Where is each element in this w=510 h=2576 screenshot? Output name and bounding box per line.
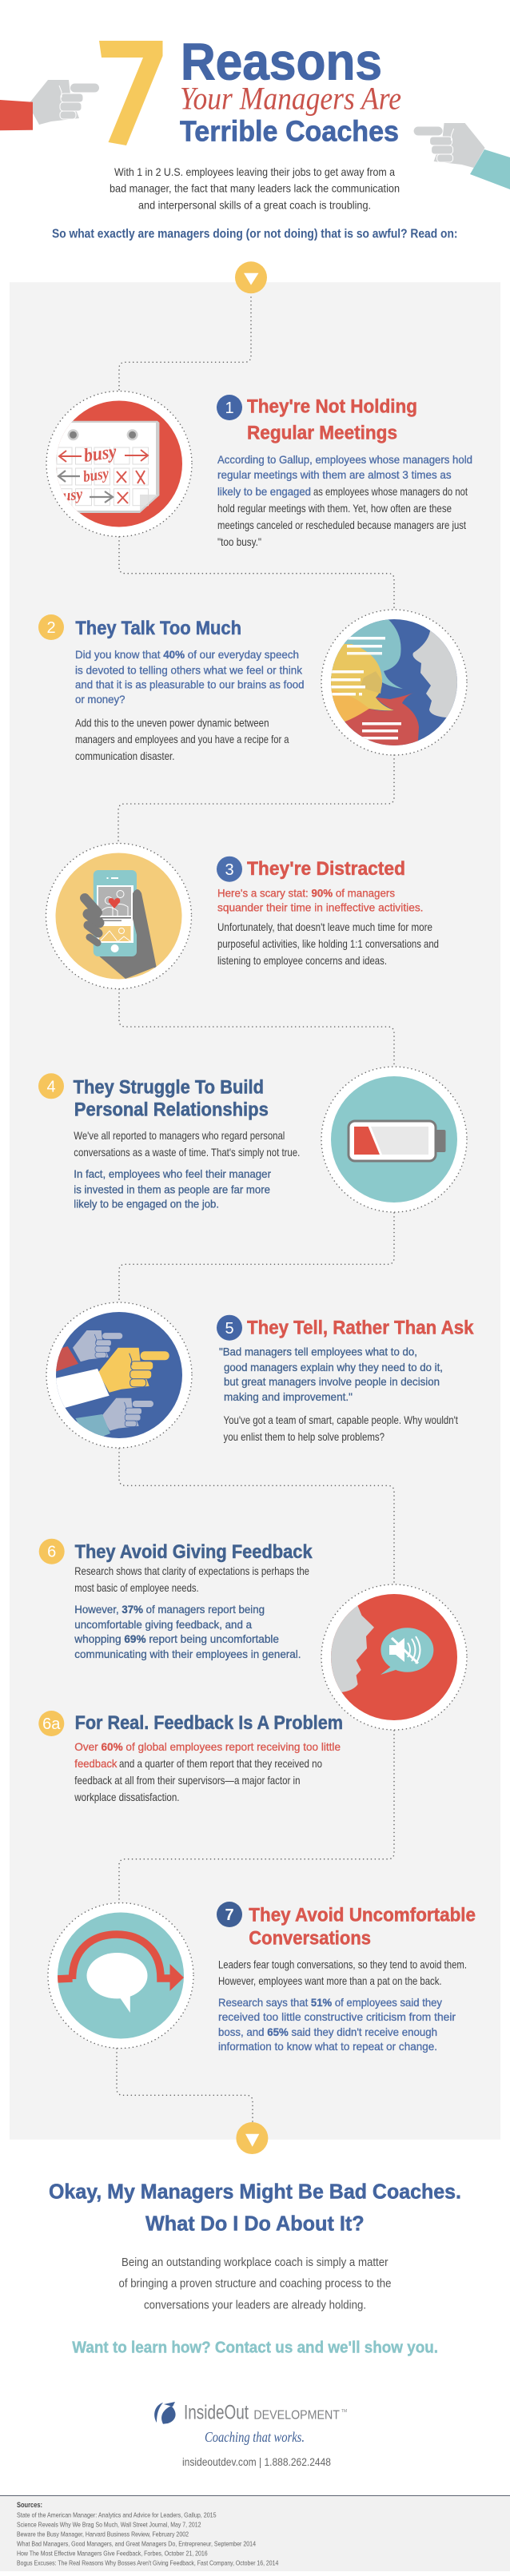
closing heading: What Do I Do About It? [145,2212,365,2236]
number badge 3: 3 [225,861,234,879]
body text 2: and that it is as pleasurable to our brains as food [75,678,304,690]
title: Your Managers Are [180,81,401,117]
hand pointing left with teal sleeve [414,123,510,189]
icon: pointing hands [46,1302,192,1448]
heading 4: Personal Relationships [74,1099,269,1121]
body text 3: Unfortunately, that doesn't leave much time for more [217,920,432,933]
body text 7: boss, and 65% said they didn't receive enough [218,2025,437,2038]
closing text: conversations your leaders are already holding. [144,2299,366,2312]
logo: InsideOut Development: DEVELOPMENT [253,2408,340,2422]
heading 7: They Avoid Uncomfortable [249,1904,476,1926]
section: reason 6 [38,1539,467,1803]
intro text: bad manager, the fact that many leaders lack the communication [110,182,400,195]
icon: calendar busy [46,392,192,537]
body text 2: Add this to the uneven power dynamic between [75,716,269,729]
panel: sources: What Bad Managers, Good Managers, and Great Managers Do, Entrepreneur, September 2014 [17,2540,256,2548]
panel: sources: Science Reveals Why We Brag So Much, Wall Street Journal, May 7, 2012 [17,2521,201,2529]
section: reason 1 [46,392,472,548]
dotted connector to reason 5 [119,1213,394,1302]
icon: yellow down arrow top [235,261,267,293]
heading 4 [74,1076,269,1121]
body text 2: or money? [75,693,126,706]
heading 1: Regular Meetings [247,422,397,443]
contact line: insideoutdev.com | 1.888.262.2448 [182,2455,331,2468]
body text 4: conversations as a waste of time. That's simply not true. [74,1146,300,1159]
body text 2: Did you know that 40% of our everyday speech [75,648,299,661]
body text 6: However, 37% of managers report being [74,1603,265,1616]
section: reason 4 [38,1067,467,1212]
body text 4: In fact, employees who feel their manager [74,1167,271,1180]
body text 7: received too little constructive criticism from their [218,2010,456,2023]
panel: sources: State of the American Manager: Analytics and Advice for Leaders, Gallup, 2015 [17,2511,217,2519]
body text 6a: Over 60% of global employees report receiving too little [74,1740,341,1753]
closing text: Being an outstanding workplace coach is simply a matter [122,2256,388,2269]
icon: calendar busy: busy [54,486,83,506]
body text 7: However, employees want more than a pat on the back. [218,1974,441,1987]
body text 3: squander their time in ineffective activities. [217,901,424,914]
section: reason 2 [38,610,480,762]
body text 1: likely to be engaged [217,485,311,498]
body text 5: but great managers involve people in decision [224,1375,440,1388]
section: reason 3 [46,844,439,989]
body text 2: communication disaster. [75,749,174,762]
body text 5 [219,1346,458,1443]
body text 3: purposeful activities, like holding 1:1 conversations and [217,937,439,950]
number badge 6a: 6a [42,1715,61,1733]
number badge 3 [217,857,242,882]
number badge 1: 1 [225,400,234,417]
number badge 4 [38,1073,64,1099]
heading 7 [249,1904,476,1950]
large yellow seven [99,41,163,145]
body text 3 [217,887,439,967]
icon: muted speaker and face [320,1584,467,1730]
body text 5: "Bad managers tell employees what to do, [219,1346,417,1358]
body text 1: According to Gallup, employees whose managers hold [217,453,472,466]
closing heading [49,2180,461,2236]
body text 1: "too busy." [217,535,261,548]
dotted connector to reason 4 [119,989,394,1067]
body text 6a: feedback [74,1757,118,1770]
body text 6a [74,1740,341,1803]
heading 2: They Talk Too Much [75,618,241,639]
body text 6 [74,1564,309,1660]
panel: grey background [10,282,500,2140]
heading 1: They're Not Holding [247,396,417,418]
icon: low battery [321,1067,467,1212]
body text 7 [218,1958,467,2053]
logo mark [154,2402,176,2424]
dotted connector to reason 1 [119,297,251,391]
call to action: Want to learn how? Contact us and we'll show you. [72,2339,438,2356]
closing text: of bringing a proven structure and coaching process to the [118,2277,392,2291]
icon: calendar busy: busy [82,465,110,486]
body text 4 [74,1129,300,1210]
panel: sources: Beware the Busy Manager, Harvard Business Review, February 2002 [17,2530,189,2538]
icon: calendar busy: busy [82,441,118,467]
icon: arrow over speech bubble [48,1903,193,2049]
lead-in question: So what exactly are managers doing (or not doing) that is so awful? Read on: [52,228,457,241]
body text 6a: and a quarter of them report that they received no [119,1757,322,1770]
body text 5: you enlist them to help solve problems? [224,1430,384,1443]
body text 1: as employees whose managers do not [313,485,468,498]
body text 6: uncomfortable giving feedback, and a [74,1618,252,1631]
dotted connector to bottom arrow [117,2049,253,2121]
body text 1: regular meetings with them are almost 3 times as [217,468,452,481]
body text 6a: feedback at all from their supervisors—a major factor in [74,1774,301,1787]
logo: InsideOut Development [154,2401,347,2424]
title: Reasons [181,32,382,90]
number badge 2: 2 [46,619,56,637]
number badge 6 [39,1539,65,1564]
number badge 7: 7 [225,1906,234,1924]
title: Terrible Coaches [180,115,399,148]
body text 5: You've got a team of smart, capable people. Why wouldn't [224,1413,458,1426]
closing text [118,2256,392,2312]
body text 6: whopping 69% report being uncomfortable [74,1632,279,1645]
section: reason 5 [46,1302,474,1448]
icon: phone in hand [46,844,192,989]
panel: sources: Sources: [17,2501,42,2509]
tagline: Coaching that works. [205,2429,305,2445]
logo: InsideOut Development: InsideOut [184,2401,249,2423]
icon: yellow down arrow bottom [236,2122,268,2154]
intro text: and interpersonal skills of a great coach is troubling. [138,199,371,212]
intro text: With 1 in 2 U.S. employees leaving their jobs to get away from a [114,165,395,178]
body text 4: likely to be engaged on the job. [74,1197,219,1210]
body text 6: most basic of employee needs. [74,1581,199,1594]
dotted connector to reason 3 [118,755,394,843]
body text 1: hold regular meetings with them. Yet, how often are these [217,502,452,515]
heading 3: They're Distracted [247,858,405,880]
number badge 1 [217,395,242,420]
body text 2: is devoted to telling others what we feel or think [75,663,303,676]
number badge 6a [38,1711,64,1736]
panel: sources: How The Most Effective Managers Give Feedback, Forbes, October 21, 2016 [17,2550,208,2558]
number badge 2 [38,614,64,640]
number badge 4: 4 [46,1078,56,1095]
body text 4: We've all reported to managers who regard personal [74,1129,285,1142]
heading 1 [247,396,417,443]
body text 4: is invested in them as people are far more [74,1183,270,1195]
heading 6: They Avoid Giving Feedback [75,1541,313,1563]
logo: InsideOut Development: TM [341,2409,347,2414]
panel: sources [0,2495,510,2571]
body text 5: good managers explain why they need to do it, [224,1361,443,1373]
number badge 5 [217,1315,242,1341]
dotted connector to reason 6 [119,1449,394,1584]
heading 5: They Tell, Rather Than Ask [247,1317,474,1338]
dotted connector to reason 7 [119,1731,394,1903]
number badge 5: 5 [225,1320,234,1338]
hand pointing right with red sleeve [0,80,99,130]
heading 6a: For Real. Feedback Is A Problem [75,1712,343,1734]
body text 7: information to know what to repeat or change. [218,2040,437,2053]
body text 5: making and improvement." [224,1390,353,1403]
number badge 6: 6 [47,1544,56,1561]
number badge 7 [217,1902,242,1927]
dotted connector to reason 2 [119,537,394,610]
body text 3: listening to employee concerns and ideas. [217,954,387,967]
title [99,32,401,148]
closing heading: Okay, My Managers Might Be Bad Coaches. [49,2180,461,2204]
body text 6: Research shows that clarity of expectations is perhaps the [74,1564,309,1577]
body text 2 [75,648,304,762]
body text 3: Here's a scary stat: 90% of managers [217,887,395,900]
body text 6a: workplace dissatisfaction. [74,1791,180,1803]
body text 1 [217,453,472,548]
heading 4: They Struggle To Build [74,1076,264,1098]
body text 2: managers and employees and you have a recipe for a [75,733,289,745]
body text 7: Research says that 51% of employees said they [218,1996,442,2009]
section: reason 7 [48,1902,476,2053]
heading 7: Conversations [249,1928,371,1950]
body text 6: communicating with their employees in general. [74,1648,301,1660]
panel: sources: Bogus Excuses: The Real Reasons Why Bosses Aren't Giving Feedback, Fast Company, October 16, 2014 [17,2559,279,2567]
intro text [110,165,400,212]
icon: talking heads [320,610,480,755]
